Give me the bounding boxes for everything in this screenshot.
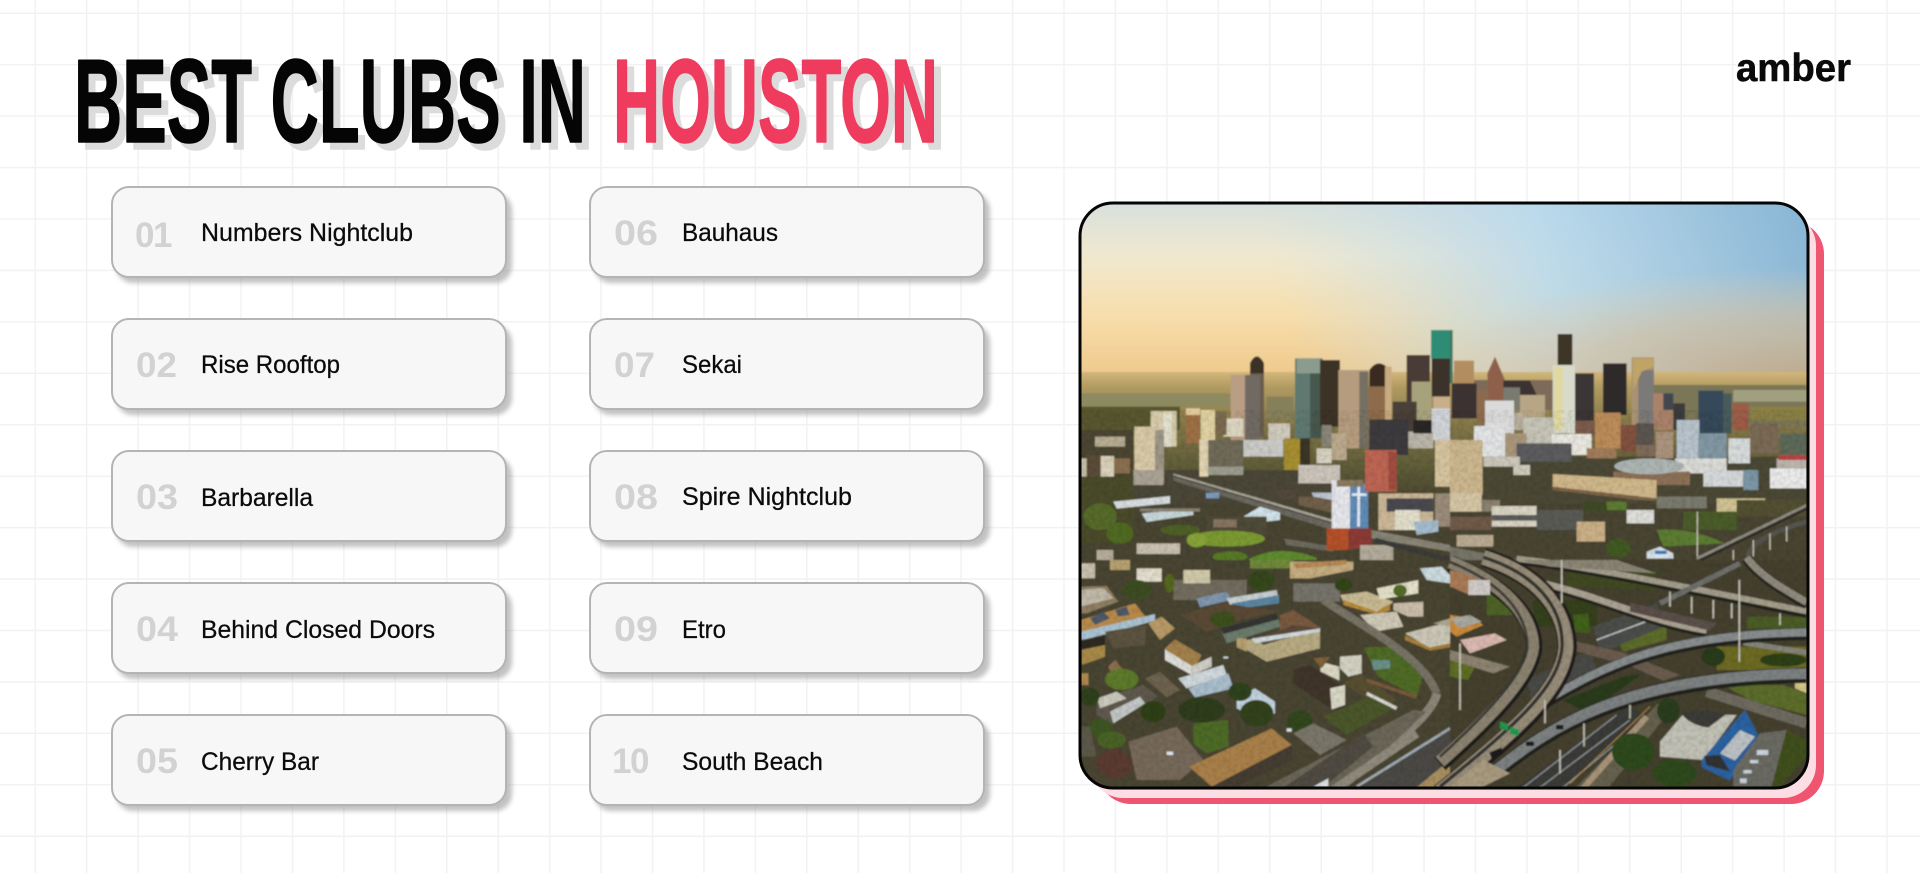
card 08 (590, 451, 990, 547)
card 03: Barbarella (201, 484, 313, 512)
quadrant B: right skyline (1450, 330, 1807, 562)
card 01: Numbers Nightclub (201, 219, 413, 247)
card 05: 05 (136, 742, 178, 781)
card 01 (112, 187, 512, 283)
card 04: 04 (136, 610, 179, 649)
card 01: 01 (135, 216, 172, 255)
card 07: Sekai (682, 351, 742, 379)
card 09: 09 (614, 610, 658, 649)
photo: aerial view of downtown Houston (1078, 200, 1812, 793)
card 07 (590, 319, 990, 415)
quadrant C: neighbourhood (1080, 560, 1450, 790)
card 03: 03 (136, 478, 178, 517)
panel: clubs column two (590, 187, 990, 811)
card 09: Etro (682, 616, 726, 644)
card 10: 10 (612, 742, 649, 781)
card 02: Rise Rooftop (201, 351, 340, 379)
card 10 (590, 715, 990, 811)
card 02: 02 (136, 346, 177, 385)
card 08: 08 (614, 478, 658, 517)
pink offset backing (1090, 213, 1824, 804)
card 02 (112, 319, 512, 415)
title: HOUSTON (613, 35, 938, 168)
logo: amber: amber (1736, 47, 1851, 90)
card 05: Cherry Bar (201, 748, 319, 776)
card 06: Bauhaus (682, 219, 778, 247)
title: BEST CLUBS IN (74, 35, 586, 168)
card 10: South Beach (682, 748, 823, 776)
card 06: 06 (614, 214, 658, 253)
card 05 (112, 715, 512, 811)
card 08: Spire Nightclub (682, 483, 852, 511)
panel: clubs column one (112, 187, 512, 811)
photo frame: Houston skyline (1078, 200, 1824, 804)
photo outline (1080, 203, 1808, 788)
card 03 (112, 451, 512, 547)
fine grain texture (1078, 410, 1812, 790)
card 04: Behind Closed Doors (201, 616, 435, 644)
card 04 (112, 583, 512, 679)
quadrant A: left skyline (1080, 330, 1450, 563)
card 06 (590, 187, 990, 283)
quadrant D: interchange (1440, 557, 1810, 793)
card 09 (590, 583, 990, 679)
card 07: 07 (614, 346, 655, 385)
